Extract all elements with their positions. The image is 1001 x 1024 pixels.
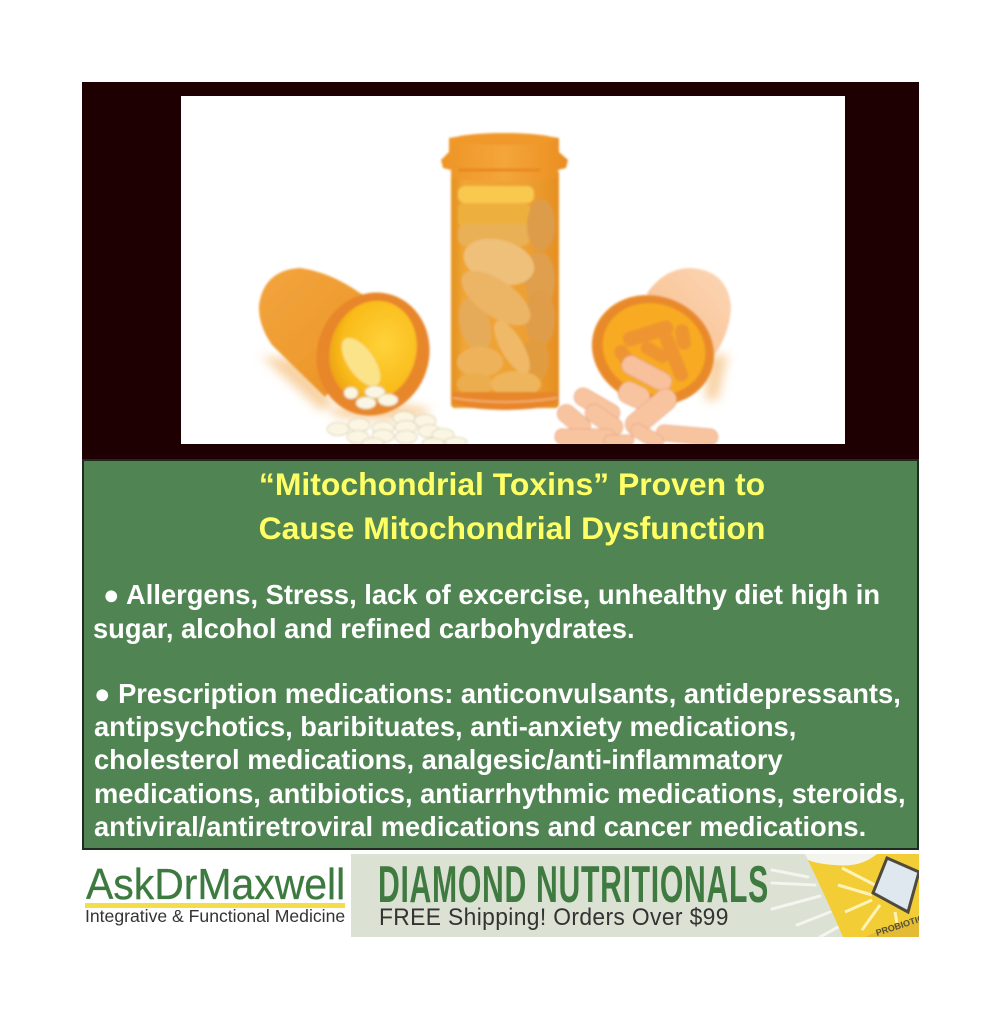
logo: AskDrMaxwell: Integrative & Functional Medicine: [85, 906, 345, 926]
icon: right bottle: [576, 268, 731, 422]
panel: dark photo frame: [82, 82, 919, 460]
icon: center bottle: [441, 133, 568, 410]
icon: left bottle: [259, 268, 445, 430]
pills in the center bottle: [453, 186, 555, 397]
text block: prescription medications: medications, antibiotics, antiarrhythmic medications, steroids,: [94, 778, 906, 809]
text block: lifestyle toxins: ● Allergens, Stress, lack of excercise, unhealthy diet high in: [103, 579, 880, 610]
photo: prescription pill bottles: [181, 96, 845, 444]
text block: prescription medications: antiviral/antiretroviral medications and cancer medications.: [94, 811, 866, 842]
text block: prescription medications: ● Prescription medications: anticonvulsants, antidepressants,: [94, 678, 901, 709]
text block: lifestyle toxins: [93, 579, 880, 644]
banner: Diamond Nutritionals: DIAMOND NUTRITIONALS: [378, 856, 769, 914]
icon: floor shadows: [261, 355, 728, 420]
text block: prescription medications: cholesterol medications, analgesic/anti-inflammatory: [94, 744, 783, 775]
heading: [259, 466, 765, 546]
icon: sunburst and supplement bottle: [770, 854, 919, 937]
banner: Diamond Nutritionals: [351, 854, 919, 937]
heading: “Mitochondrial Toxins” Proven to: [259, 466, 765, 502]
text block: prescription medications: antipsychotics, baribituates, anti-anxiety medications,: [94, 711, 796, 742]
banner: Diamond Nutritionals: FREE Shipping! Orders Over $99: [379, 904, 729, 931]
text block: lifestyle toxins: sugar, alcohol and refined carbohydrates.: [93, 613, 635, 644]
logo: AskDrMaxwell: AskDrMaxwell: [86, 860, 345, 909]
icon: spilled white tablets: [327, 412, 467, 448]
icon: spilled pink pills: [554, 378, 719, 451]
panel: green text panel: [82, 459, 919, 850]
pills at the left bottle mouth: [344, 386, 398, 409]
text block: prescription medications: [94, 678, 906, 842]
heading: Cause Mitochondrial Dysfunction: [259, 510, 765, 546]
